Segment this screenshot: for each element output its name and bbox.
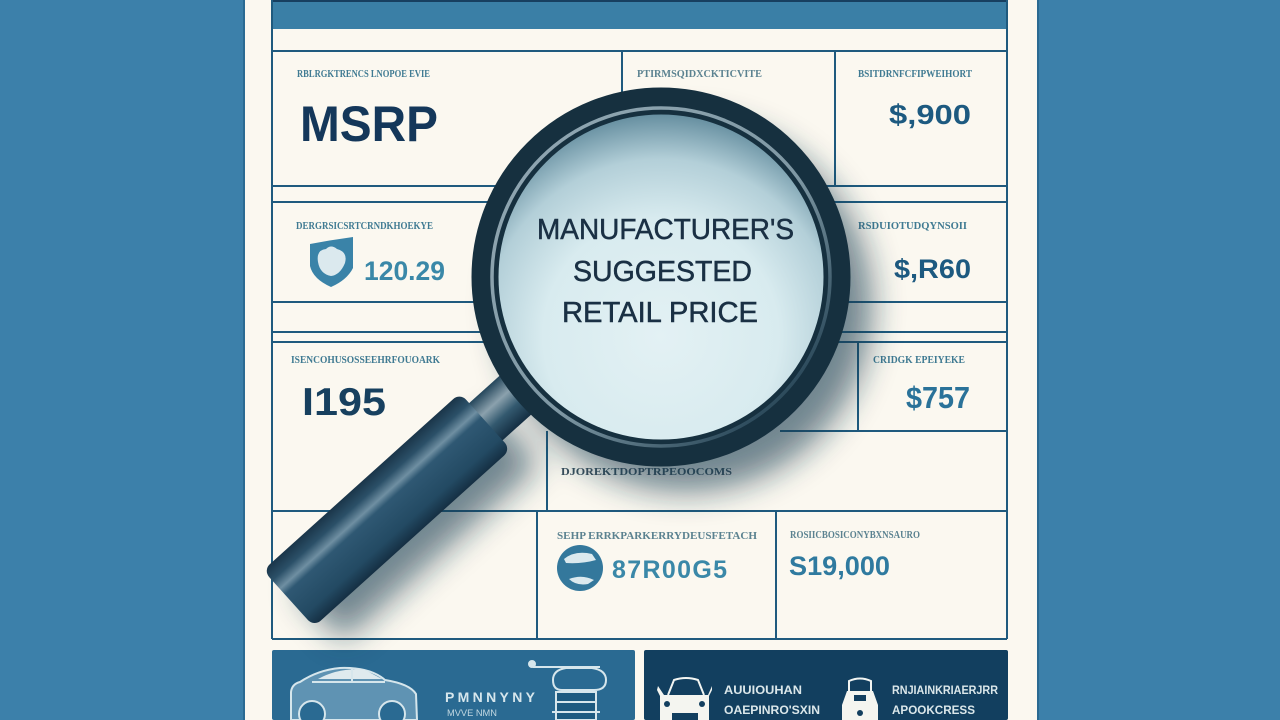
bottom panel: blue: [272, 650, 635, 720]
icon: car front: [657, 678, 712, 720]
cell: top middle label: PTIRMSQIDXCKTICVITE: [637, 69, 762, 80]
bottom panel: navy: AUUIOUHAN: [724, 683, 802, 697]
magnified text: SUGGESTED: [573, 256, 752, 288]
icon: globe: [557, 545, 603, 591]
page sheet: [243, 0, 1039, 720]
cell: top right price: BSITDRNFCFIPWEIHORT: [858, 69, 972, 80]
cell: 1195: [291, 355, 441, 424]
price table grid: [272, 0, 1007, 639]
magnifying glass: [263, 101, 837, 627]
magnifier rim: [485, 101, 837, 453]
cell: centre label: DJOREKTDOPTRPEOOCOMS: [561, 467, 732, 478]
icon: vehicle rear: [842, 678, 878, 720]
cell: $19,000: [789, 530, 920, 581]
cell: 1195: I195: [302, 381, 386, 424]
cell: globe value: 87R00G5: [612, 556, 727, 584]
magnified text: [537, 214, 794, 329]
header band: [272, 0, 1008, 29]
cell: MSRP: RBLRGKTRENCS LNOPOE EVIE: [297, 69, 430, 80]
icon: shield: [310, 237, 353, 287]
cell: globe value: [557, 531, 757, 591]
cell: top right price: [858, 69, 972, 130]
bottom panel: navy: RNJIAINKRIAERJRR: [892, 683, 998, 697]
cell: second row right price: $,R60: [894, 254, 971, 284]
cell: shield value: [296, 221, 445, 287]
magnified text: MANUFACTURER'S: [537, 214, 794, 246]
cell: top right price: $,900: [889, 99, 971, 130]
icon: sedan car: [291, 668, 417, 720]
magnifier lens: [497, 113, 825, 441]
cell: $757: $757: [906, 380, 970, 415]
bottom panel: navy: [644, 650, 1008, 720]
magnifier handle: [263, 362, 549, 627]
cell: shield value: 120.29: [364, 256, 445, 286]
cell: $757: [873, 355, 970, 415]
bottom panel: blue: MVVE NMN: [447, 708, 497, 718]
magnified text: RETAIL PRICE: [562, 297, 758, 329]
magnifier drop shadow: [296, 120, 872, 642]
bottom panel: blue: PMNNYNY: [445, 689, 536, 705]
bottom panel: navy: APOOKCRESS: [892, 703, 975, 717]
cell: 1195: ISENCOHUSOSSEEHRFOUOARK: [291, 355, 441, 366]
icon: engine: [529, 661, 606, 720]
cell: $19,000: S19,000: [789, 551, 890, 581]
bottom panel: navy: OAEPINRO'SXIN: [724, 703, 820, 717]
cell: second row right price: [858, 221, 971, 284]
cell: globe value: SEHP ERRKPARKERRYDEUSFETACH: [557, 531, 757, 542]
cell: $19,000: ROSIICBOSICONYBXNSAURO: [790, 530, 920, 541]
cell: MSRP: MSRP: [300, 96, 438, 152]
cell: MSRP: [297, 69, 438, 152]
cell: shield value: DERGRSICSRTCRNDKHOEKYE: [296, 221, 433, 232]
cell: $757: CRIDGK EPEIYEKE: [873, 355, 965, 366]
cell: second row right price: RSDUIOTUDQYNSOII: [858, 221, 967, 232]
